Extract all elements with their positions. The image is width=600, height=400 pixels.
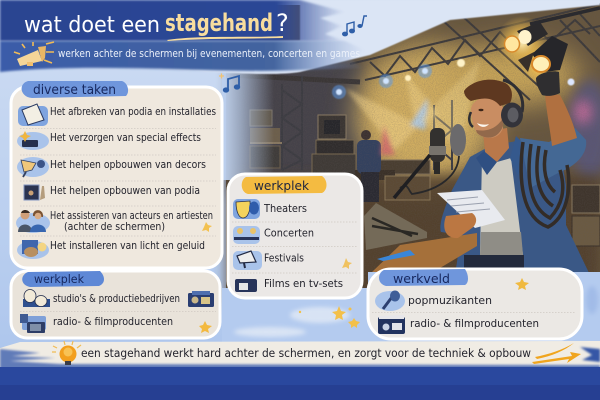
row: assisteren: Het assisteren van acteurs en artiesten (50, 210, 213, 222)
forearm (545, 93, 577, 146)
row: assisteren (16, 210, 213, 233)
row: popmuzikanten: popmuzikanten (408, 295, 492, 307)
title: ? (276, 9, 289, 37)
stage scene illustration (226, 4, 600, 305)
glove (536, 71, 560, 96)
row: radio en film: radio- & filmproducenten (53, 316, 173, 328)
row: radio en film werkveld (378, 315, 539, 334)
arrow (532, 343, 581, 364)
paint area below scene (222, 272, 600, 345)
icon: megaphone (14, 42, 54, 66)
heading: werkplek left (22, 271, 104, 287)
beard shadow (476, 118, 503, 138)
neck (483, 128, 509, 162)
panel: werkplek left (11, 271, 220, 338)
subtitle: werken achter de schermen bij evenementen, concerten en games (58, 47, 360, 60)
icon: music notes top (342, 16, 367, 36)
row: licht en geluid: Het installeren van licht en geluid (50, 240, 205, 252)
row: decors: Het helpen opbouwen van decors (50, 159, 206, 171)
row: radio en film (20, 314, 173, 333)
t-shirt (480, 157, 523, 255)
sound mixer and desk (364, 203, 477, 290)
stage lights (332, 59, 574, 99)
row: special effects: Het verzorgen van special effects (50, 132, 201, 144)
header band light (0, 41, 365, 72)
lighting truss (230, 4, 600, 100)
light brush band (0, 0, 600, 74)
face (471, 97, 503, 138)
row: assisteren: (achter de schermen) (64, 221, 165, 233)
row: podia: Het helpen opbouwen van podia (50, 185, 200, 197)
star decoration (202, 222, 212, 232)
bottom banner (0, 341, 600, 370)
eye (478, 109, 484, 111)
heading: werkplek middle: werkplek (254, 178, 310, 193)
paint blotches below scene (234, 286, 598, 337)
icon: camera (188, 291, 214, 307)
jacket body (440, 140, 590, 275)
row: podia (24, 185, 200, 200)
grain texture (226, 5, 600, 305)
hand holding paper (437, 190, 505, 238)
row: theaters: Theaters (263, 203, 307, 215)
row: studio's: studio's & productiebedrijven (53, 293, 180, 305)
row: afbreken (18, 104, 216, 126)
row: festivals: Festivals (264, 252, 304, 264)
row: concerten: Concerten (264, 228, 314, 240)
bottom dark band lower (0, 385, 600, 400)
paint fade over scene left (222, 40, 274, 180)
row: special effects (17, 131, 201, 150)
row: decors (17, 157, 206, 177)
heading: werkveld: werkveld (393, 271, 450, 286)
headphones (503, 80, 523, 112)
sleeve (520, 128, 586, 188)
title: stagehand (165, 9, 273, 37)
title: wat doet een (24, 12, 160, 38)
panel: werkplek middle (228, 174, 362, 298)
bottom banner text: een stagehand werkt hard achter de schermen, en zorgt voor de techniek & opbouw (81, 347, 531, 360)
cable coil (521, 142, 569, 227)
icon: light bulb (52, 341, 81, 365)
panel: werkveld (368, 269, 582, 339)
row: afbreken: Het afbreken van podia en installaties (50, 106, 216, 118)
row dividers (20, 128, 216, 236)
smile (477, 123, 489, 127)
heading: diverse taken: diverse taken (33, 83, 116, 98)
row: radio en film werkveld: radio- & filmproducenten (410, 318, 539, 330)
heading: werkveld (379, 269, 468, 286)
row: films en tv-sets: Films en tv-sets (264, 278, 343, 290)
stars decoration below middle panel (299, 306, 360, 328)
bottom dark band (0, 367, 600, 400)
row: popmuzikanten (375, 290, 492, 311)
row: licht en geluid (17, 240, 205, 259)
stagehand figure (440, 71, 590, 275)
icon: music notes left (219, 74, 240, 93)
heading: werkplek left: werkplek (34, 272, 84, 286)
hair (464, 80, 512, 106)
row: studio's (23, 290, 180, 307)
crew member silhouette (357, 130, 381, 202)
spotlights (496, 8, 600, 84)
header band dark (0, 0, 345, 41)
vertical tower (282, 76, 452, 170)
trousers (464, 255, 524, 273)
panel: diverse taken (11, 81, 222, 268)
speaker stacks (250, 110, 600, 246)
studio microphone (394, 124, 466, 198)
star decoration (342, 258, 352, 269)
stage beams (345, 60, 480, 155)
stars decoration (199, 321, 212, 333)
title (24, 9, 289, 41)
jacket collar (476, 146, 497, 175)
star decoration (515, 278, 529, 290)
